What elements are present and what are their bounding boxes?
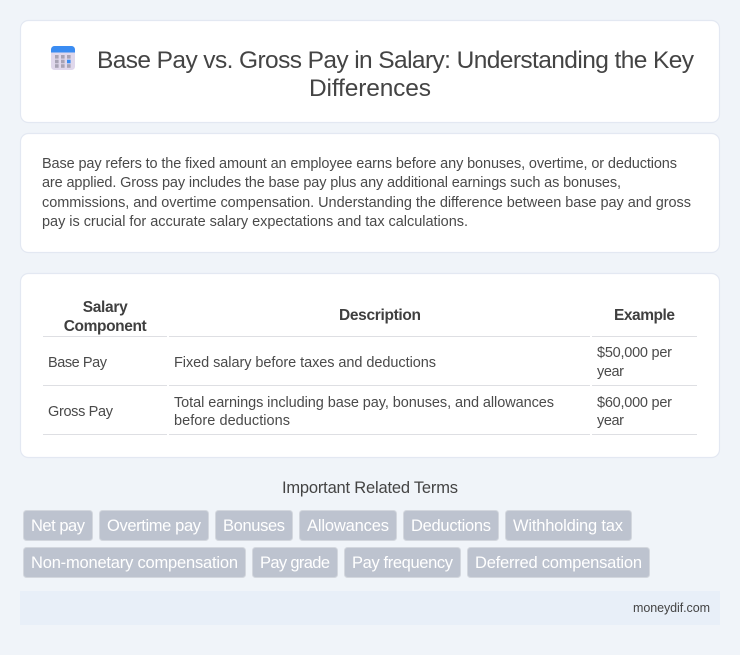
- table row: base pay: Fixed salary before taxes and deductions: [174, 355, 436, 371]
- tag: overtime pay: [100, 510, 208, 540]
- tag: pay grade: Pay grade: [260, 554, 330, 572]
- panel: introduction text: pay is crucial for accurate salary expectations and tax calculations.: [42, 214, 468, 230]
- heading: Base Pay vs. Gross Pay in Salary: Understanding the Key: [97, 47, 695, 74]
- tag: deferred compensation: [468, 548, 650, 578]
- table row: base pay: Base Pay: [48, 355, 108, 371]
- footer: moneydif.com: [633, 601, 710, 615]
- tag: overtime pay: Overtime pay: [107, 517, 202, 535]
- table row: gross pay: before deductions: [174, 413, 290, 429]
- panel: introduction text: commissions, and overtime compensation. Understanding the difference between base pay and gross: [42, 195, 691, 211]
- table header: Salary: [83, 299, 128, 316]
- panel: introduction text: are applied. Gross pay includes the base pay plus any additional earnings such as bonuses,: [42, 175, 621, 191]
- table header: [64, 299, 675, 335]
- heading: Differences: [309, 75, 431, 102]
- tag: pay frequency: [344, 548, 460, 578]
- tag: net pay: [24, 510, 92, 540]
- icon: calendar: [51, 46, 75, 70]
- tag: bonuses: [216, 510, 292, 540]
- tag: deductions: [404, 510, 498, 540]
- tag: net pay: Net pay: [31, 517, 86, 535]
- heading: related terms: Important Related Terms: [282, 479, 458, 497]
- tag: pay grade: [252, 548, 338, 578]
- table row: gross pay: Total earnings including base pay, bonuses, and allowances: [174, 395, 554, 411]
- table header: Example: [614, 307, 675, 324]
- table row: gross pay: year: [597, 413, 624, 429]
- tag: withholding tax: [506, 510, 632, 540]
- tag: deferred compensation: Deferred compensation: [475, 554, 642, 572]
- tag: pay frequency: Pay frequency: [352, 554, 454, 572]
- tag: allowances: [300, 510, 396, 540]
- tag: bonuses: Bonuses: [223, 517, 285, 535]
- table row: gross pay: Gross Pay: [48, 404, 114, 420]
- table header: Component: [64, 318, 147, 335]
- tag: non-monetary compensation: Non-monetary compensation: [31, 554, 238, 572]
- footer: [20, 591, 720, 625]
- tag: non-monetary compensation: [24, 548, 246, 578]
- table row: base pay: [48, 345, 672, 380]
- table row: base pay: year: [597, 364, 624, 380]
- related term tags: [24, 510, 650, 578]
- panel: introduction text: [20, 134, 720, 252]
- table header: Description: [339, 307, 421, 324]
- tag: deductions: Deductions: [411, 517, 491, 535]
- heading: [97, 47, 695, 102]
- panel: introduction text: Base pay refers to the fixed amount an employee earns before any bonuses, overtime, or deductions: [42, 156, 677, 172]
- table row: base pay: $50,000 per: [597, 345, 672, 361]
- table row: gross pay: [48, 395, 672, 429]
- table row: gross pay: $60,000 per: [597, 395, 672, 411]
- tag: allowances: Allowances: [307, 517, 389, 535]
- panel: comparison table: [20, 274, 720, 458]
- tag: withholding tax: Withholding tax: [513, 517, 624, 535]
- panel: title: [20, 20, 720, 122]
